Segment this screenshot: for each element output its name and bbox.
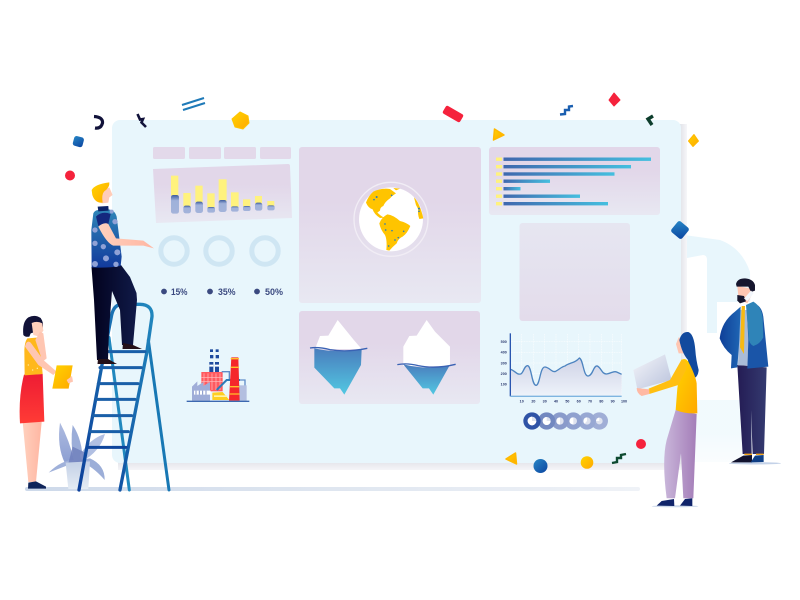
confetti: red diamond	[609, 93, 620, 106]
percent legend	[161, 287, 283, 297]
hair	[736, 278, 755, 292]
sleeve	[96, 213, 111, 226]
confetti: gold triangle	[494, 129, 504, 140]
shirt	[738, 310, 750, 365]
beard	[737, 295, 746, 303]
line chart: 70	[588, 400, 592, 404]
line chart: 20	[531, 400, 535, 404]
confetti: green chevron	[648, 116, 653, 125]
icon: factory	[187, 349, 249, 401]
line chart: 60	[577, 400, 581, 404]
panel: small tabs	[153, 147, 291, 159]
face	[102, 187, 113, 203]
jacket right	[747, 303, 768, 369]
hand	[637, 388, 649, 396]
confetti: arc	[94, 116, 103, 128]
shoes	[98, 343, 142, 364]
trousers	[92, 265, 137, 360]
panel: stacked bar chart	[153, 164, 292, 223]
line chart: 30	[543, 400, 547, 404]
collar	[98, 206, 109, 211]
confetti: gold hexagon	[232, 112, 249, 129]
shoes	[657, 498, 692, 506]
raised arm	[35, 332, 47, 362]
line chart	[501, 333, 627, 404]
blouse	[24, 337, 43, 375]
face	[32, 322, 43, 337]
tablet	[633, 354, 672, 389]
bars	[171, 176, 275, 214]
board shadow	[118, 124, 687, 470]
percent legend: 50%	[265, 287, 283, 297]
sweater	[676, 359, 697, 413]
figure: woman with clipboard	[20, 316, 73, 489]
line chart: 80	[599, 400, 603, 404]
line chart: 10	[520, 400, 524, 404]
trousers	[664, 410, 697, 498]
line chart: 400	[501, 351, 507, 355]
figure: woman with tablet	[633, 332, 699, 507]
shoes	[731, 455, 752, 462]
background shape behind board	[670, 233, 752, 465]
line chart: 40	[554, 400, 558, 404]
confetti: gold triangle lower	[506, 453, 516, 464]
confetti: gold hexagon lower	[581, 456, 593, 469]
arm	[98, 223, 154, 248]
hair	[92, 182, 109, 203]
confetti: gold diamond	[688, 134, 698, 146]
confetti: squiggle	[138, 114, 146, 127]
line chart: 300	[501, 361, 507, 365]
confetti: double line	[182, 98, 205, 110]
shadow	[652, 505, 698, 507]
confetti: blue square	[72, 135, 84, 148]
confetti: blue diamond	[670, 220, 690, 240]
hand	[67, 376, 73, 383]
confetti: green squiggle	[612, 454, 626, 463]
donut rings	[161, 238, 278, 264]
hair	[23, 316, 43, 337]
panel: world map	[299, 147, 481, 303]
hair	[679, 332, 699, 378]
percent legend: 35%	[218, 287, 236, 297]
lower arm	[25, 342, 57, 375]
legs	[23, 422, 42, 482]
confetti: red bar	[442, 105, 464, 123]
ground shadow	[25, 487, 640, 491]
confetti: red dot	[65, 170, 75, 180]
confetti: red dot lower	[636, 439, 646, 449]
globe	[354, 182, 428, 256]
line chart: 500	[501, 340, 507, 344]
main board	[112, 120, 681, 463]
face	[737, 286, 753, 303]
icon: potted plant	[49, 423, 105, 489]
confetti: blue hexagon	[534, 459, 548, 473]
line chart: 200	[501, 372, 507, 376]
jacket left	[720, 307, 741, 368]
donut row under chart	[523, 412, 608, 430]
shirt	[91, 209, 122, 268]
trousers	[737, 365, 767, 454]
sleeve	[649, 359, 687, 394]
clipboard	[52, 365, 73, 389]
panel: horizontal bar chart	[489, 147, 660, 215]
face	[676, 337, 685, 353]
ladder	[79, 304, 169, 490]
iceberg right	[397, 320, 456, 395]
line chart: 100	[621, 400, 627, 404]
line chart: 100	[501, 383, 507, 387]
shoe	[28, 481, 46, 489]
panel: empty card	[520, 223, 630, 321]
percent legend: 15%	[171, 287, 188, 297]
line chart: 50	[565, 400, 569, 404]
panel: icebergs	[299, 311, 480, 404]
line chart: 90	[611, 400, 615, 404]
figure: man on ladder	[91, 182, 154, 364]
shirt pattern	[92, 210, 120, 267]
tie	[740, 306, 745, 354]
phone	[744, 291, 754, 301]
iceberg left	[310, 320, 367, 395]
figure: man on phone	[720, 278, 781, 464]
shadow	[729, 462, 781, 464]
confetti: blue squiggle	[560, 106, 573, 114]
skirt	[20, 374, 44, 423]
blouse dots	[28, 349, 38, 371]
raised arm	[746, 302, 763, 346]
